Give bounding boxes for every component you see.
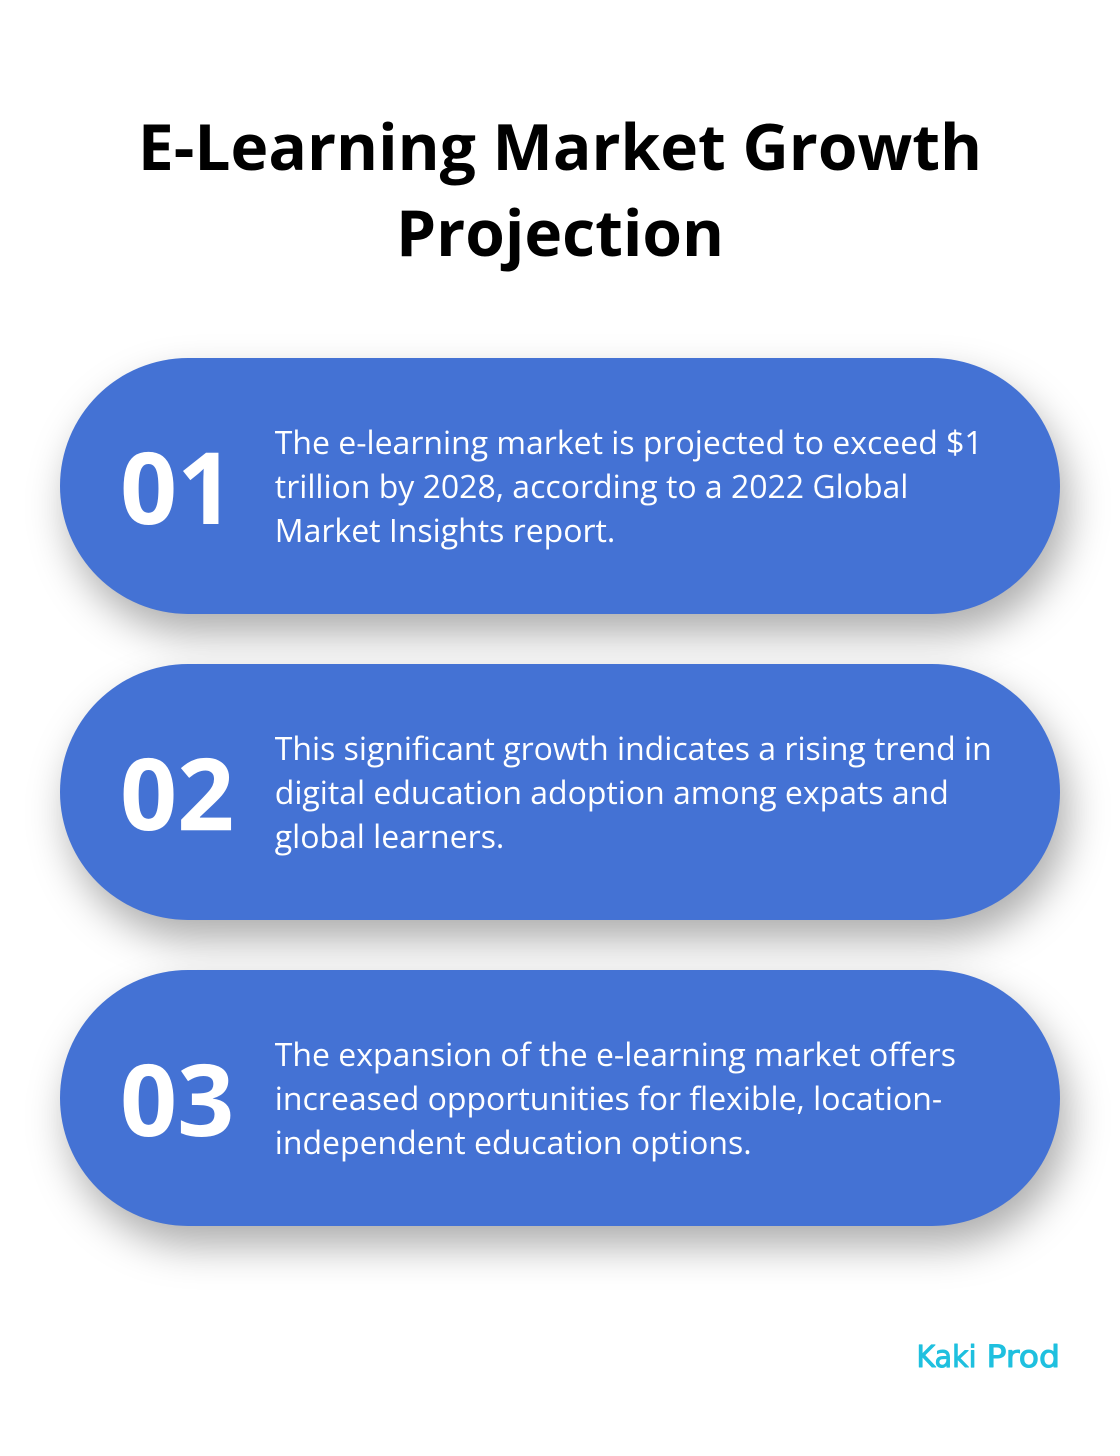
text block 01: trillion by 2028, according to a 2022 Global xyxy=(275,465,908,508)
text block 01: The e-learning market is projected to exceed $1 xyxy=(275,421,983,464)
text block 03: independent education options. xyxy=(275,1121,752,1164)
logo: Kaki Prod: Kaki xyxy=(916,1340,976,1375)
pill background 03 xyxy=(60,970,1060,1226)
text block 02: global learners. xyxy=(275,815,504,858)
number 03: 03 xyxy=(120,1030,234,1166)
text block 01: Market Insights report. xyxy=(275,509,615,552)
number 01: 01 xyxy=(120,418,234,554)
number 02: 02 xyxy=(120,724,234,860)
text block 03 xyxy=(275,1033,956,1164)
text block 03: The expansion of the e-learning market offers xyxy=(275,1033,956,1076)
panel: step 03 xyxy=(60,970,1068,1246)
text block 02: This significant growth indicates a rising trend in xyxy=(275,727,992,770)
title: Projection xyxy=(396,188,724,275)
logo: Kaki Prod xyxy=(916,1340,1060,1375)
logo: Kaki Prod: Prod xyxy=(986,1340,1060,1375)
panel: step 02 xyxy=(60,664,1068,940)
title: E-Learning Market Growth xyxy=(138,102,982,189)
panel: step 01 xyxy=(60,358,1068,634)
text block 02: digital education adoption among expats and xyxy=(275,771,949,814)
pill background 02 xyxy=(60,664,1060,920)
pill background 01 xyxy=(60,358,1060,614)
text block 02 xyxy=(275,727,992,858)
text block 01 xyxy=(275,421,983,552)
text block 03: increased opportunities for flexible, location- xyxy=(275,1077,942,1120)
title xyxy=(138,102,982,275)
